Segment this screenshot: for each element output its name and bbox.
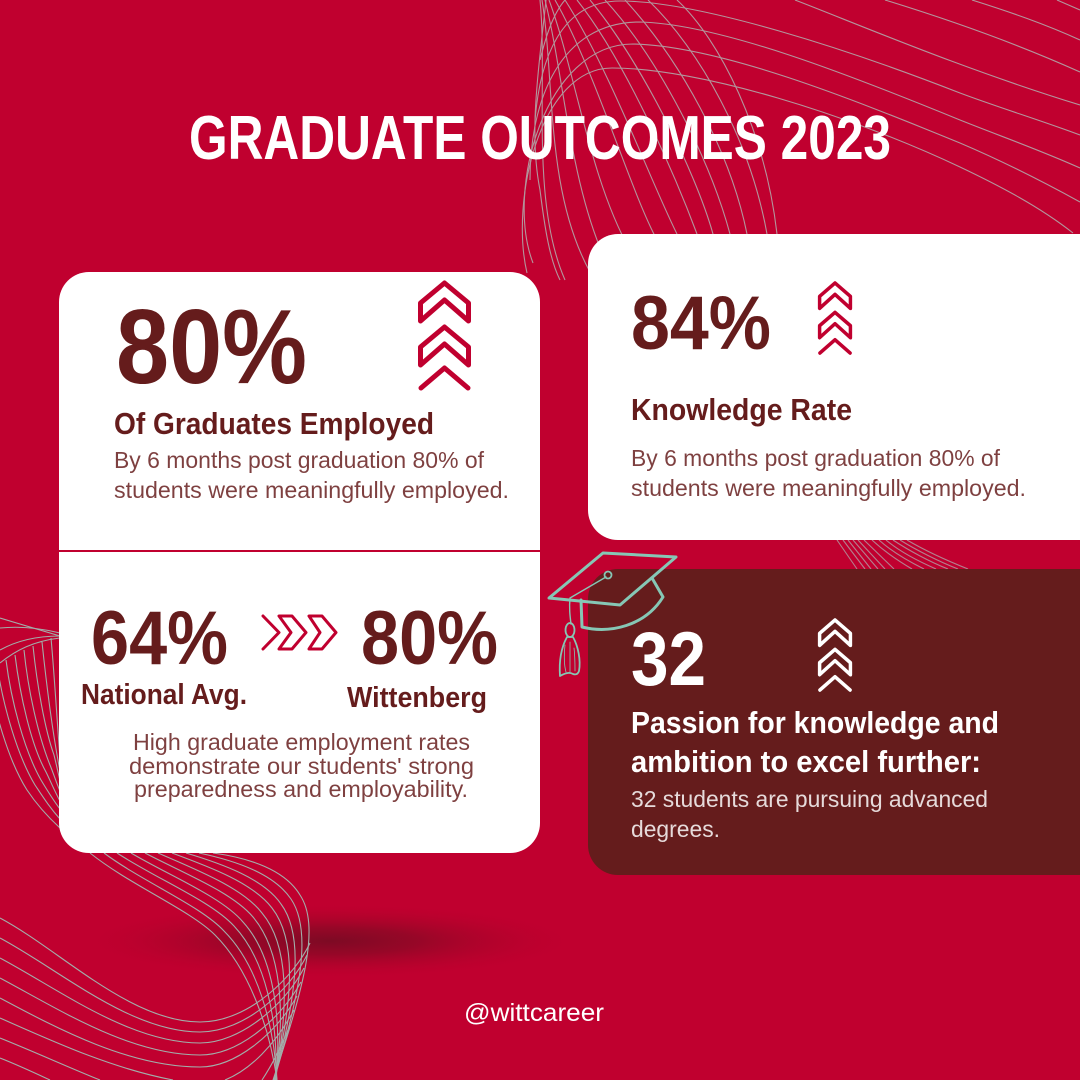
heading: passion for knowledge bbox=[631, 705, 999, 779]
heading: of graduates employed: Of Graduates Employed bbox=[114, 406, 434, 441]
icon: up chevrons small bbox=[820, 283, 850, 353]
text: knowledge detail: students were meaningfully employed. bbox=[631, 475, 1026, 501]
divider line bbox=[59, 550, 540, 552]
text: advanced degrees detail: 32 students are pursuing advanced bbox=[631, 786, 988, 812]
text: knowledge detail: By 6 months post graduation 80% of bbox=[631, 445, 1001, 471]
stat: national average 64 percent: 64% bbox=[91, 596, 228, 681]
wave pattern: top right bbox=[522, 0, 1080, 280]
stat: national average 64 percent: National Avg. bbox=[81, 679, 247, 711]
ground shadow bbox=[80, 903, 580, 979]
text: advanced degrees detail: degrees. bbox=[631, 816, 720, 842]
heading: knowledge rate: Knowledge Rate bbox=[631, 392, 852, 427]
heading: passion for knowledge: Passion for knowledge and bbox=[631, 705, 999, 740]
stat: 80 percent employed: 80% bbox=[116, 288, 307, 406]
heading: passion for knowledge: ambition to excel further: bbox=[631, 744, 981, 779]
icon: graduation cap bbox=[549, 553, 676, 676]
text: comparison detail: High graduate employment rates bbox=[133, 729, 470, 755]
wave pattern: below knowledge panel bbox=[837, 540, 968, 569]
stat: 32 students: 32 bbox=[631, 617, 706, 702]
text: comparison detail bbox=[129, 729, 474, 802]
text: employment detail: students were meaningfully employed. bbox=[114, 477, 509, 503]
panel: employment bbox=[59, 272, 540, 853]
wave pattern: bottom left bbox=[0, 853, 310, 1080]
icon: up chevrons white bbox=[820, 620, 850, 690]
wave pattern: left edge bbox=[0, 618, 60, 828]
stat: national average 64 percent bbox=[81, 596, 247, 711]
title: GRADUATE OUTCOMES 2023 bbox=[189, 104, 891, 173]
text: employment detail: By 6 months post graduation 80% of bbox=[114, 447, 485, 473]
text: employment detail bbox=[114, 447, 509, 503]
text: advanced degrees detail bbox=[631, 786, 988, 842]
stat: wittenberg 80 percent: Wittenberg bbox=[347, 682, 487, 714]
text: knowledge detail bbox=[631, 445, 1026, 501]
icon: up chevrons large bbox=[420, 283, 468, 388]
handle: @wittcareer bbox=[464, 999, 604, 1027]
text: comparison detail: preparedness and employability. bbox=[134, 776, 468, 802]
icon: right chevrons bbox=[263, 616, 336, 649]
stat: wittenberg 80 percent bbox=[347, 596, 498, 714]
stat: wittenberg 80 percent: 80% bbox=[361, 596, 498, 681]
panel: advanced degrees bbox=[588, 569, 1080, 875]
text: comparison detail: demonstrate our students' strong bbox=[129, 753, 474, 779]
stat: 84 percent: 84% bbox=[631, 281, 771, 366]
panel: knowledge rate bbox=[588, 234, 1080, 540]
